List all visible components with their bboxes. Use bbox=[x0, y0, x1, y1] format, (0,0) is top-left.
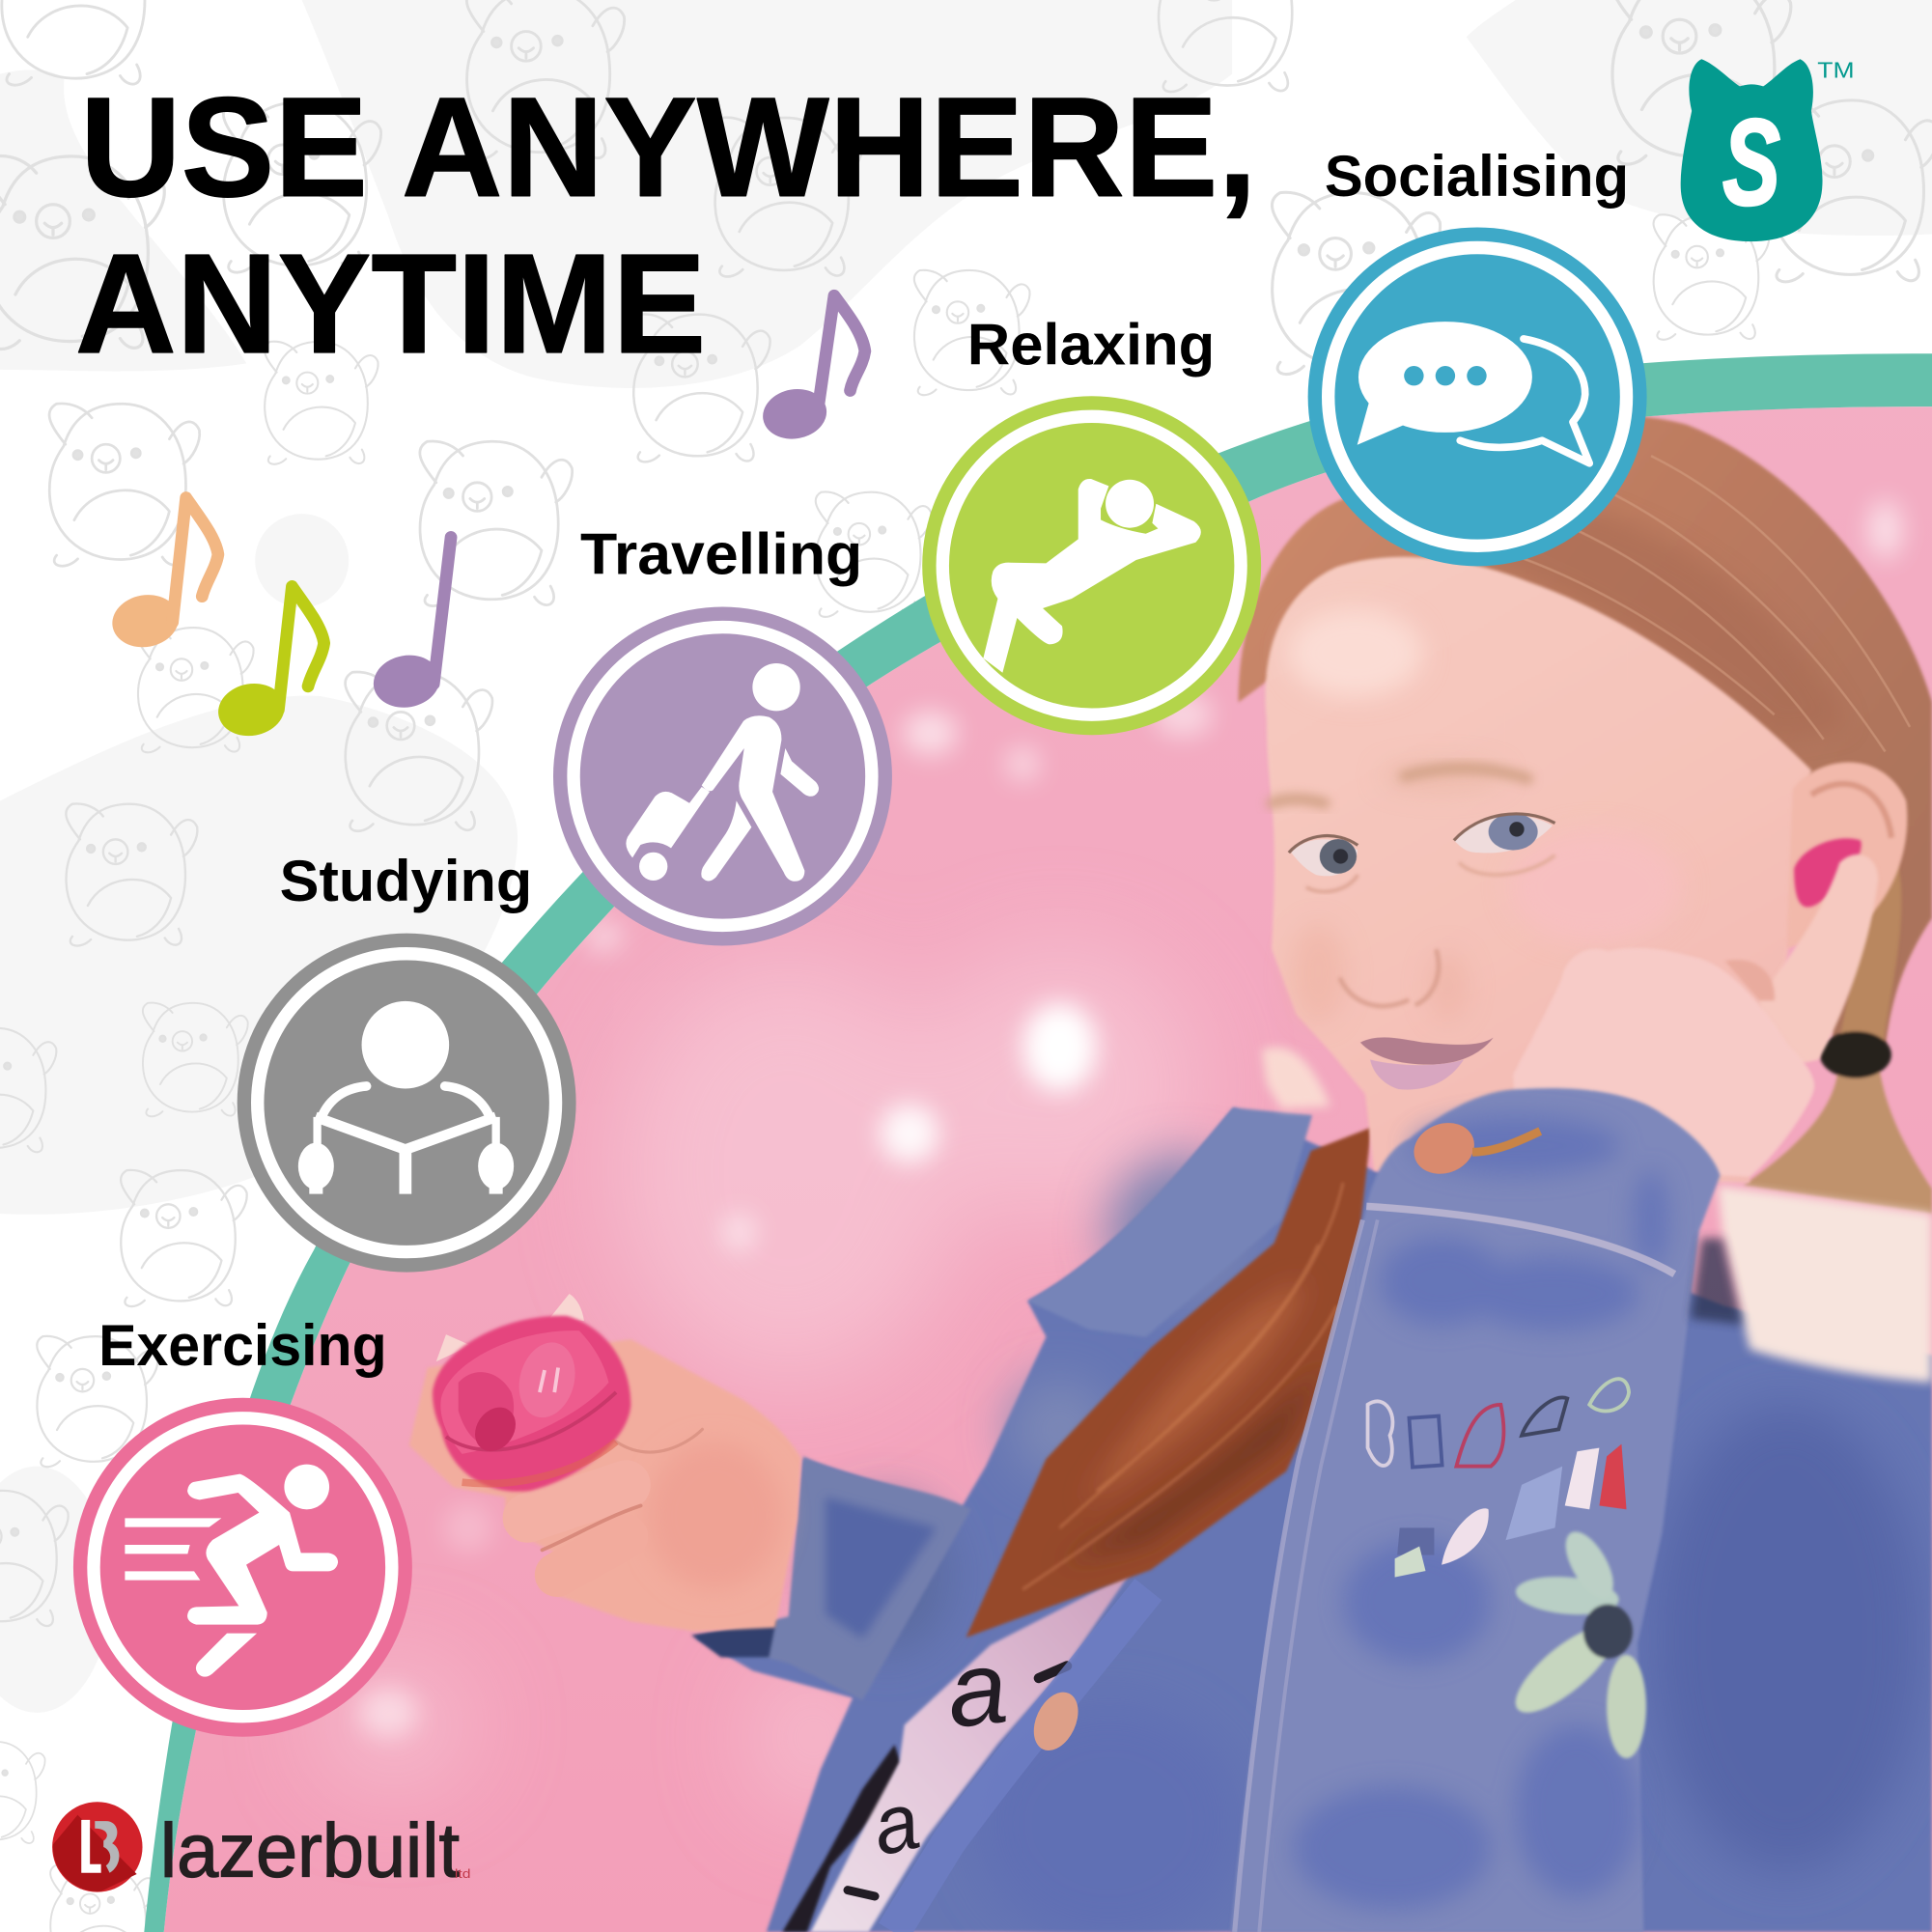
panel: relaxing bbox=[922, 313, 1261, 735]
lazerbuilt logo bbox=[52, 1802, 470, 1893]
panel: travelling bbox=[553, 522, 892, 945]
label: relaxing: Relaxing bbox=[967, 313, 1215, 378]
girl: jacket shading bbox=[826, 1159, 1922, 1932]
girl: jacket body bbox=[696, 1107, 1932, 1932]
girl: sleeve flower bbox=[1503, 1525, 1646, 1758]
icon: running person bbox=[73, 1398, 412, 1737]
note: purple beamed top bbox=[759, 295, 865, 444]
girl: jacket front placket bbox=[893, 1589, 1148, 1932]
girl: right eye bbox=[1454, 813, 1554, 875]
girl: nose bbox=[1340, 951, 1439, 1006]
lazerbuilt logo: ltd bbox=[455, 1866, 470, 1881]
girl: fist on cheek bbox=[1513, 948, 1814, 1177]
label: travelling: Travelling bbox=[580, 522, 862, 587]
photo background: pink bokeh bbox=[164, 406, 1932, 1932]
girl: earbud in ear bbox=[1794, 838, 1862, 907]
squishmallows S logo: S bbox=[1722, 94, 1780, 232]
girl: T-shirt with lettering: a bbox=[941, 1628, 1013, 1750]
girl: left eye bbox=[1289, 836, 1358, 891]
left hand bbox=[409, 1339, 800, 1632]
lazerbuilt logo: lazerbuilt bbox=[160, 1807, 460, 1893]
logo mark bbox=[52, 1802, 143, 1892]
girl: fur collar behind chin bbox=[1262, 1048, 1330, 1109]
girl: finger on earbud bbox=[1759, 854, 1878, 1072]
girl: jacket button bbox=[1025, 1685, 1087, 1757]
girl: braid bbox=[966, 1128, 1371, 1638]
girl: palm shadow bbox=[1725, 960, 1775, 1000]
label: socialising: Socialising bbox=[1325, 144, 1629, 209]
photo: girl wearing earbud, holding case bbox=[409, 415, 1932, 1932]
girl: cheek and forehead shading bbox=[1288, 608, 1682, 1022]
left sleeve and cuff bbox=[691, 1456, 971, 1700]
girl: sleeve button bbox=[1407, 1114, 1540, 1182]
girl: hair back bbox=[1239, 415, 1932, 1048]
girl: hair strands bbox=[1405, 456, 1910, 751]
title: USE ANYWHERE, bbox=[80, 69, 1257, 227]
note: purple stem bbox=[370, 537, 451, 713]
girl: lips bbox=[1360, 1037, 1494, 1090]
girl: face bbox=[1265, 557, 1811, 1183]
girl: eyebrows bbox=[1272, 769, 1527, 803]
girl: T-shirt with lettering: a bbox=[864, 1775, 927, 1872]
teal arc band bbox=[144, 353, 1932, 1932]
title bbox=[75, 69, 1257, 383]
title: ANYTIME bbox=[75, 225, 706, 383]
girl: hair strands shade bbox=[1454, 492, 1848, 740]
note: orange bbox=[108, 498, 218, 653]
panel: exercising bbox=[73, 1313, 412, 1737]
icon: reclining person bbox=[922, 396, 1261, 735]
note: lime bbox=[214, 586, 324, 741]
icon: reader with book bbox=[238, 934, 576, 1273]
label: exercising: Exercising bbox=[98, 1313, 387, 1378]
squishmallows S logo: TM bbox=[1817, 57, 1855, 82]
girl: sleeve embroidery bbox=[1368, 1379, 1629, 1577]
squishmallows S logo bbox=[1681, 57, 1855, 241]
hand: fingers bbox=[527, 1429, 702, 1575]
panel: socialising bbox=[1308, 144, 1647, 566]
girl: ear bbox=[1786, 762, 1907, 949]
icon: walker with suitcase bbox=[553, 607, 892, 945]
girl: T-shirt with lettering bbox=[811, 1574, 1130, 1932]
girl: sherpa collar bbox=[1718, 1186, 1932, 1383]
girl: raised sleeve bbox=[1231, 1088, 1721, 1932]
girl: left collar bbox=[1027, 1107, 1312, 1337]
girl: shadow beside sleeve bbox=[1691, 1239, 1742, 1325]
panel: studying bbox=[238, 849, 576, 1273]
icon: speech bubbles bbox=[1308, 227, 1647, 566]
girl: pigtail bbox=[1744, 862, 1932, 1214]
earbud charging case bbox=[433, 1294, 630, 1492]
music notes bbox=[108, 295, 865, 741]
girl: dark jacket lining bbox=[782, 1745, 901, 1932]
label: studying: Studying bbox=[280, 849, 532, 913]
